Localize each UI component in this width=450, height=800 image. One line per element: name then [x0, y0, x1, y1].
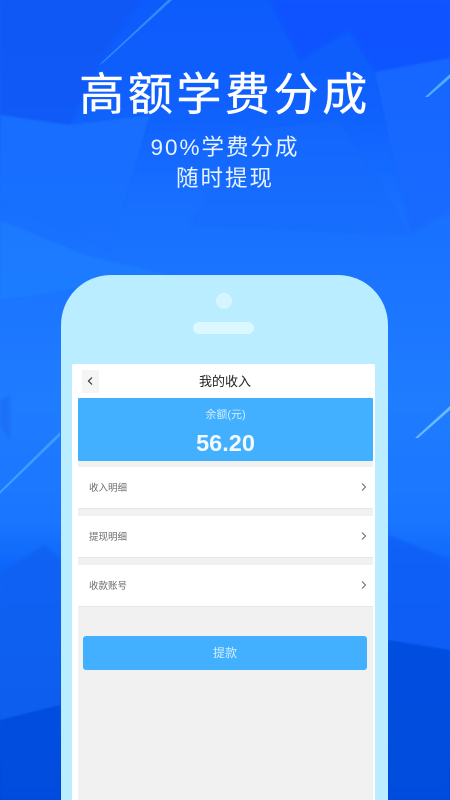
navigation bar	[72, 364, 375, 398]
streaks	[98, 0, 172, 66]
screen title: 我的收入	[199, 374, 251, 389]
withdraw button: 提款	[213, 646, 237, 660]
row: payment account	[72, 565, 375, 607]
balance card	[78, 398, 373, 461]
balance amount: 56.20	[196, 430, 255, 456]
row: income details	[72, 467, 375, 509]
phone speaker	[193, 322, 254, 334]
balance label: 余额(元)	[205, 409, 246, 421]
withdraw button	[83, 636, 367, 670]
subtitle line 1: 90%学费分成	[150, 135, 300, 160]
screen content background	[78, 461, 373, 800]
title: 高额学费分成	[79, 69, 371, 120]
back button	[82, 370, 99, 393]
subtitle line 2: 随时提现	[176, 166, 274, 191]
row: withdrawal details	[72, 516, 375, 558]
app screen	[72, 364, 375, 800]
phone mockup	[61, 275, 388, 800]
phone camera	[216, 293, 232, 309]
row: payment account: 收款账号	[89, 581, 127, 592]
row: income details: 收入明细	[89, 483, 127, 494]
row: withdrawal details: 提现明细	[89, 532, 127, 543]
